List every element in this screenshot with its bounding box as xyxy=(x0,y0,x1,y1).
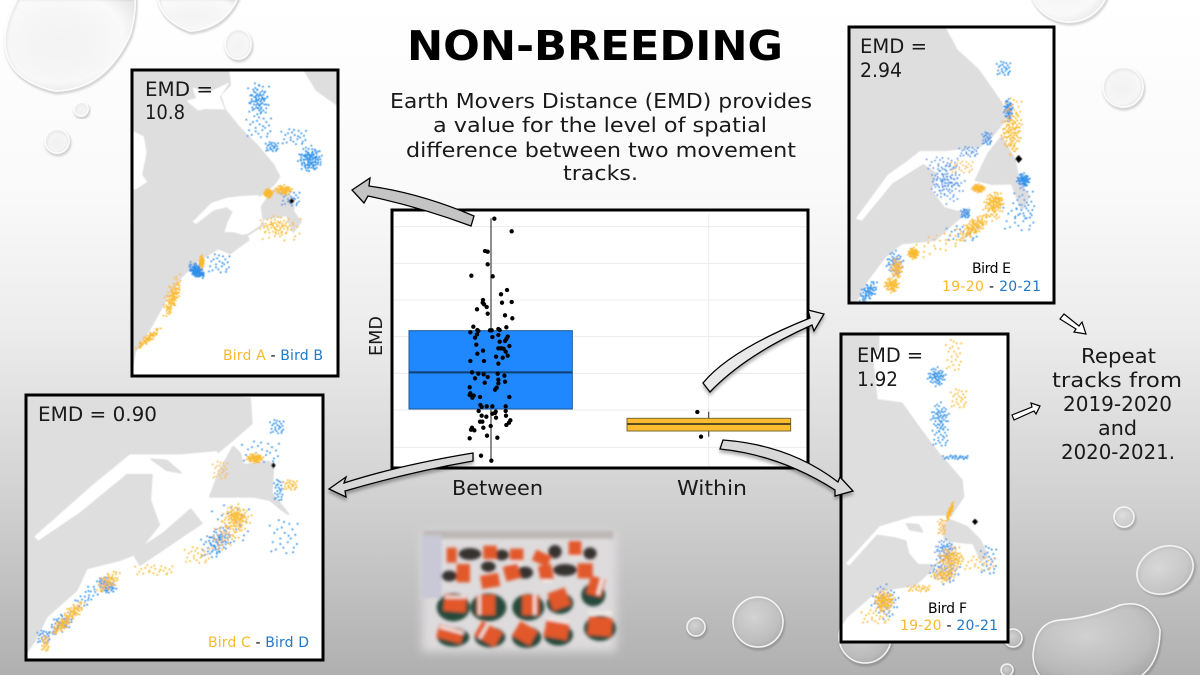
map E land and tracks xyxy=(850,28,1036,302)
arrow: Bird F to repeat note xyxy=(1012,403,1040,420)
EMD value: EMD = xyxy=(857,344,923,367)
x axis label: within: Within xyxy=(677,476,747,500)
panel frame xyxy=(132,70,338,376)
repeat tracks text: Repeat xyxy=(1081,344,1156,368)
intro text block: a value for the level of spatial xyxy=(433,113,767,137)
title: NON-BREEDING xyxy=(407,22,783,70)
EMD value: 10.8 xyxy=(145,101,185,124)
EMD value xyxy=(860,35,927,82)
repeat tracks text: and xyxy=(1098,416,1137,440)
panel frame xyxy=(26,395,323,660)
arrow: chart to Bird C/D map xyxy=(329,453,473,497)
arrow: chart to Bird F map xyxy=(720,440,853,496)
y axis label: EMD xyxy=(366,316,387,356)
between box xyxy=(409,331,572,409)
arrow: chart to Bird A/B map xyxy=(352,178,474,226)
chart frame xyxy=(392,210,808,468)
arrow: Bird E to repeat note xyxy=(1060,314,1086,334)
panel: map Bird C vs Bird D xyxy=(20,390,323,660)
map A land and tracks xyxy=(134,72,336,366)
repeat tracks text: 2019-2020 xyxy=(1063,392,1172,416)
within whisker xyxy=(707,412,711,437)
boxplot chart xyxy=(392,210,808,468)
EMD value: 2.94 xyxy=(860,59,902,82)
bird name: Bird F xyxy=(928,601,967,617)
x axis label: between: Between xyxy=(452,476,543,500)
between whisker xyxy=(489,218,493,462)
EMD value: 1.92 xyxy=(857,368,898,391)
map C land and tracks xyxy=(28,396,300,653)
intro text block: tracks. xyxy=(563,161,638,185)
panel: map Bird E repeat tracks xyxy=(845,20,1054,307)
plot contents xyxy=(393,213,807,467)
bird key: Bird C - Bird D xyxy=(208,635,309,651)
photo: geolocator tags on white towel xyxy=(422,531,617,652)
intro text block xyxy=(390,89,812,185)
bird key: Bird A - Bird B xyxy=(223,348,323,364)
bird name: Bird E xyxy=(972,261,1011,277)
EMD value: EMD = xyxy=(145,78,213,101)
EMD value: EMD = xyxy=(860,35,927,58)
map F land and tracks xyxy=(842,336,998,625)
season key: 19-20 - 20-21 xyxy=(942,279,1041,295)
EMD value xyxy=(145,78,213,124)
jittered data points xyxy=(470,219,701,461)
panel: map Bird F repeat tracks xyxy=(835,330,1008,642)
repeat tracks text: 2020-2021. xyxy=(1061,440,1175,464)
panel frame xyxy=(849,27,1054,303)
intro text block: Earth Movers Distance (EMD) provides xyxy=(390,89,812,113)
EMD value: EMD = 0.90 xyxy=(38,403,157,426)
repeat tracks text: tracks from xyxy=(1052,368,1182,392)
arrow: chart to Bird E map xyxy=(703,310,824,392)
EMD value xyxy=(857,344,923,391)
season key: 19-20 - 20-21 xyxy=(900,618,998,634)
repeat tracks text xyxy=(1052,344,1182,464)
panel frame xyxy=(841,334,1008,642)
within box xyxy=(627,418,791,431)
intro text block: difference between two movement xyxy=(406,138,796,162)
panel: map Bird A vs Bird B xyxy=(130,65,340,378)
